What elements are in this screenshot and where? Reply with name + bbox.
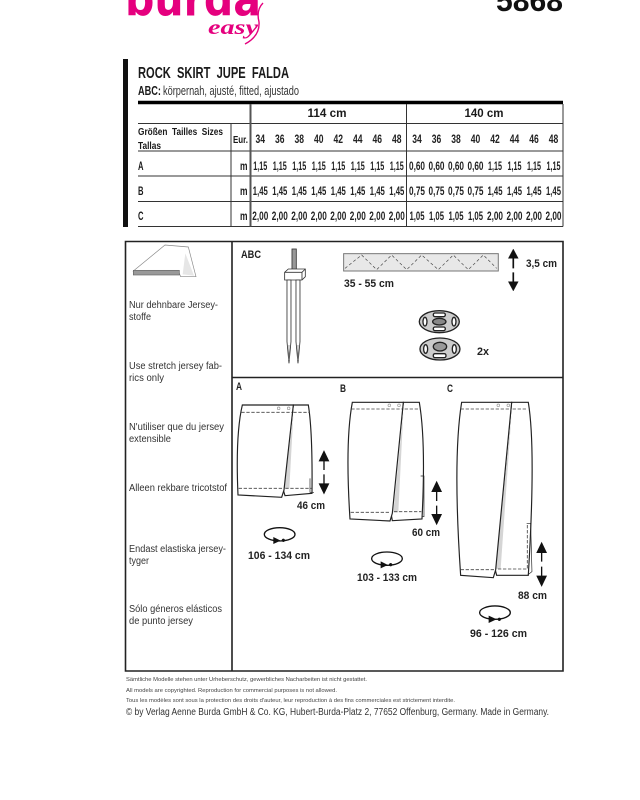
- yardage table: 2,00: [526, 211, 542, 223]
- fabric recommendation text: rics only: [129, 373, 164, 384]
- yardage table: 2,00: [369, 211, 385, 223]
- yardage table: 1,45: [526, 186, 542, 198]
- elastic width value: 3,5 cm: [526, 258, 557, 270]
- copyright notices: Tous les modèles sont sous la protection des droits d'auteur, leur reproduction à des fins commerciales est strictement interdite.: [126, 698, 455, 704]
- yardage table: 36: [275, 134, 285, 146]
- yardage table: m: [240, 186, 248, 198]
- copyright notices: All models are copyrighted. Reproduction for commercial purposes is not allowed.: [126, 688, 337, 694]
- yardage table: m: [240, 161, 248, 173]
- yardage table: 2,00: [487, 211, 503, 223]
- fabric recommendation text: N'utiliser que du jersey: [129, 422, 224, 433]
- fabric recommendation text: Sólo géneros elásticos: [129, 604, 222, 615]
- logo: burda easy: [125, 0, 263, 44]
- yardage table: 1,15: [292, 161, 307, 173]
- label: ABC: ABC: [241, 249, 261, 261]
- yardage table: 1,15: [390, 161, 404, 173]
- icon: twin needle: [285, 249, 305, 363]
- yardage table: 1,05: [448, 211, 464, 223]
- yardage table: 1,15: [546, 161, 561, 173]
- yardage table: 1,15: [370, 161, 385, 173]
- icon: fabric: [133, 245, 196, 277]
- yardage table: 44: [353, 134, 363, 146]
- yardage table: 48: [392, 134, 402, 146]
- hip size B: 103 - 133 cm: [357, 572, 417, 584]
- side bar: [123, 59, 128, 227]
- yardage table: 0,75: [428, 186, 445, 198]
- arrow: length C: [537, 543, 546, 585]
- subtitle: körpernah, ajusté, fitted, ajustado: [163, 83, 299, 98]
- arrow: length A: [320, 452, 328, 493]
- fabric recommendation text: Nur dehnbare Jersey-: [129, 300, 218, 311]
- yardage table: 1,45: [253, 186, 268, 198]
- yardage table: 1,15: [527, 161, 541, 173]
- yardage table: 1,45: [311, 186, 327, 198]
- fabric recommendation text: tyger: [129, 556, 150, 567]
- icon: hip measure C: [480, 606, 510, 623]
- yardage table: 2,00: [506, 211, 522, 223]
- subtitle: [138, 83, 299, 98]
- fabric recommendation text: stoffe: [129, 312, 151, 323]
- yardage table: 0,75: [409, 186, 425, 198]
- fabric recommendation text: Endast elastiska jersey-: [129, 544, 226, 555]
- yardage table: 2,00: [330, 211, 346, 223]
- yardage table: Tallas: [138, 141, 161, 152]
- title: ROCK SKIRT JUPE FALDA: [138, 65, 289, 82]
- yardage table: 42: [334, 134, 343, 146]
- hip size A: 106 - 134 cm: [248, 550, 310, 562]
- yardage table: 1,45: [331, 186, 346, 198]
- yardage table: m: [240, 211, 248, 223]
- yardage table: 40: [471, 134, 480, 146]
- yardage table: 114 cm: [308, 108, 346, 120]
- yardage table: 2,00: [252, 211, 268, 223]
- view C: C: [447, 383, 453, 395]
- yardage table: 2,00: [311, 211, 327, 223]
- yardage table: 1,45: [292, 186, 307, 198]
- yardage table: 1,15: [331, 161, 346, 173]
- yardage table: 40: [314, 134, 324, 146]
- yardage table: 0,60: [428, 161, 444, 173]
- yardage table: 34: [256, 134, 265, 146]
- icon: zigzag stitched elastic: [344, 254, 498, 271]
- fabric recommendation text: extensible: [129, 434, 171, 445]
- fabric recommendation text: [129, 300, 227, 627]
- copyright notices: [126, 677, 549, 718]
- icon: hip measure B: [372, 552, 402, 568]
- yardage table: 1,15: [351, 161, 365, 173]
- yardage table: 42: [490, 134, 500, 146]
- hip size C: 96 - 126 cm: [470, 628, 527, 640]
- yardage table: 1,45: [370, 186, 385, 198]
- yardage table: [138, 102, 563, 226]
- yardage table: 2,00: [291, 211, 307, 223]
- length A: 46 cm: [297, 500, 325, 512]
- arrow: elastic width: [508, 249, 518, 291]
- yardage table: 2,00: [389, 211, 405, 223]
- yardage table: A: [138, 161, 144, 173]
- view A: A: [236, 381, 242, 393]
- yardage table: B: [138, 186, 144, 198]
- skirt C drawing: [457, 402, 532, 578]
- yardage table: 1,15: [253, 161, 268, 173]
- icon: hip measure A: [264, 528, 295, 544]
- yardage table: C: [138, 211, 144, 223]
- yardage table: Eur.: [233, 135, 248, 146]
- view A: [236, 381, 328, 562]
- label: quantity: 2x: [477, 346, 490, 358]
- copyright notices: Sämtliche Modelle stehen unter Urheberschutz, gewerbliches Nacharbeiten ist nicht gestattet.: [126, 677, 367, 683]
- logo: burda easy: easy: [208, 15, 259, 39]
- length B: 60 cm: [412, 527, 440, 539]
- yardage table: 2,00: [350, 211, 366, 223]
- fabric recommendation text: de punto jersey: [129, 616, 193, 627]
- yardage table: 1,15: [312, 161, 326, 173]
- yardage table: 1,05: [468, 211, 483, 223]
- yardage table: 2,00: [272, 211, 288, 223]
- yardage table: Größen Tailles Sizes: [138, 127, 223, 138]
- panel: frame and dividers: [126, 242, 563, 671]
- view B: [340, 383, 441, 584]
- yardage table: 0,60: [409, 161, 425, 173]
- yardage table: 38: [451, 134, 461, 146]
- yardage table: 1,15: [508, 161, 522, 173]
- yardage table: 1,45: [350, 186, 366, 198]
- yardage table: 46: [529, 134, 539, 146]
- icon: snap fasteners: [419, 311, 460, 360]
- yardage table: 2,00: [546, 211, 562, 223]
- yardage table: 1,45: [272, 186, 288, 198]
- yardage table: 1,45: [546, 186, 561, 198]
- subtitle: ABC:: [138, 83, 161, 98]
- yardage table: 1,45: [488, 186, 503, 198]
- yardage table: 0,60: [468, 161, 484, 173]
- view B: B: [340, 383, 346, 395]
- yardage table: 1,15: [273, 161, 287, 173]
- fabric recommendation text: Use stretch jersey fab-: [129, 361, 222, 372]
- yardage table: 1,05: [410, 211, 425, 223]
- yardage table: 1,45: [507, 186, 522, 198]
- length C: 88 cm: [518, 590, 547, 602]
- yardage table: 0,75: [468, 186, 484, 198]
- yardage table: 1,15: [488, 161, 502, 173]
- yardage table: 46: [373, 134, 382, 146]
- yardage table: 36: [432, 134, 441, 146]
- yardage table: 48: [549, 134, 559, 146]
- yardage table: 38: [295, 134, 304, 146]
- yardage table: 44: [510, 134, 520, 146]
- yardage table: 1,45: [389, 186, 405, 198]
- skirt A drawing: [237, 405, 314, 497]
- copyright notices: © by Verlag Aenne Burda GmbH & Co. KG, Hubert-Burda-Platz 2, 77652 Offenburg, Germany. Made in Germany.: [126, 707, 549, 718]
- view C: [447, 383, 547, 640]
- yardage table: 0,75: [448, 186, 464, 198]
- yardage table: 140 cm: [464, 108, 504, 120]
- yardage table: 1,05: [429, 211, 444, 223]
- arrow: length B: [432, 482, 441, 524]
- yardage table: 0,60: [448, 161, 464, 173]
- elastic length: 35 - 55 cm: [344, 278, 394, 290]
- skirt B drawing: [348, 402, 424, 521]
- fabric recommendation text: Alleen rekbare tricotstof: [129, 483, 227, 494]
- yardage table: 34: [412, 134, 422, 146]
